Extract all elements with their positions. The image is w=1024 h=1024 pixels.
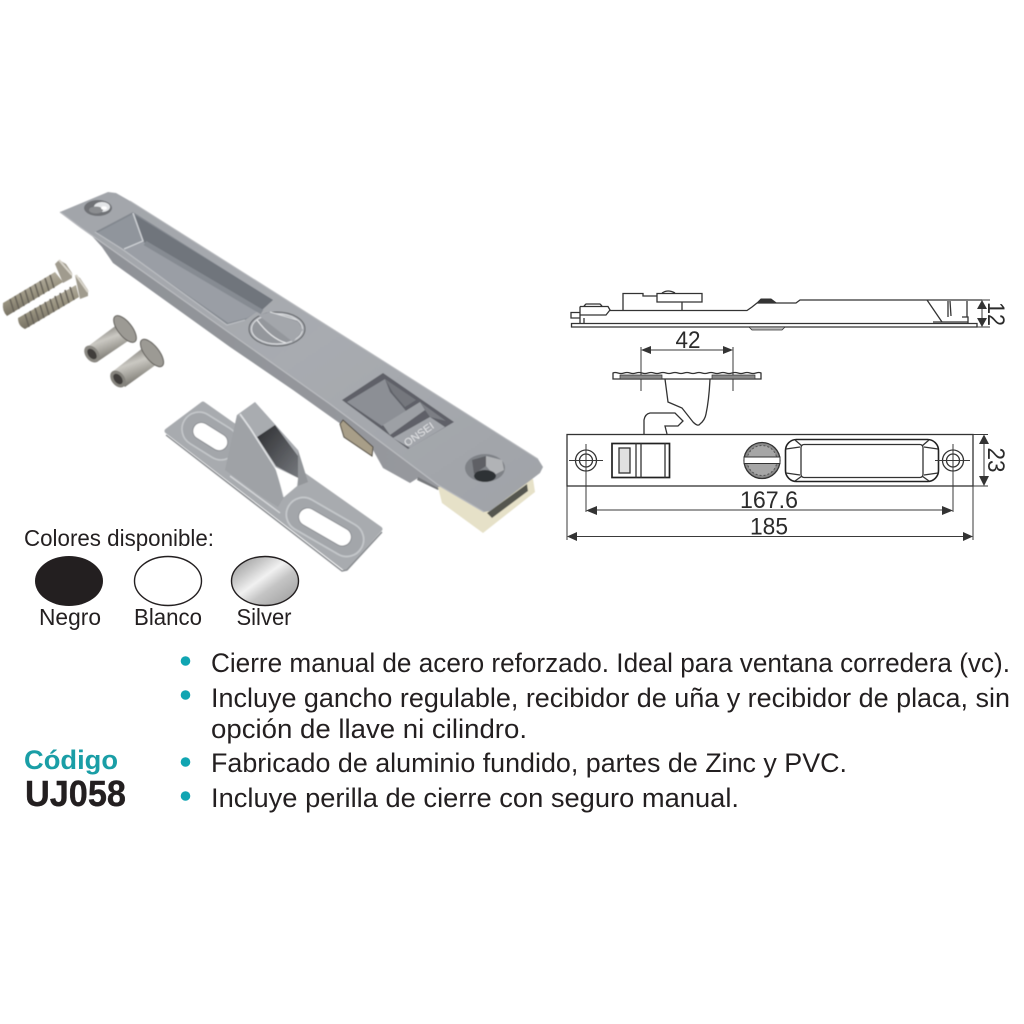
keeper opening: [257, 425, 298, 478]
metal tab below lock: [340, 420, 373, 456]
knob: [744, 442, 780, 478]
right screw hole: [935, 444, 970, 512]
feature bullet list: opción de llave ni cilindro.: [211, 714, 527, 744]
colour swatch: Negro: [35, 556, 103, 630]
colour swatch: Negro: Negro: [39, 604, 101, 630]
colour swatch: Blanco: Blanco: [134, 604, 202, 630]
keeper upper slot: [176, 406, 244, 466]
nylon slider block: [438, 479, 535, 533]
keeper tower: [225, 402, 308, 507]
colour swatch: Silver: Silver: [236, 604, 292, 630]
screw 1: [3, 260, 72, 316]
dimension: 185: 185: [750, 514, 788, 540]
catch window: [342, 373, 454, 449]
screw 2: [18, 275, 88, 329]
feature bullet list: [181, 648, 1010, 813]
finger recess: [95, 212, 273, 325]
keeper base: [167, 404, 380, 568]
dimension: height 23: [973, 434, 1009, 486]
feature bullet list: Fabricado de aluminio fundido, partes de Zinc y PVC.: [211, 748, 847, 778]
feature bullet list: Cierre manual de acero reforzado. Ideal para ventana corredera (vc).: [211, 648, 1010, 678]
faceplate: [60, 192, 543, 512]
sleeve nut 1: [81, 312, 140, 365]
dimension: height 23: 23: [982, 448, 1009, 472]
dimension: 167.6: [586, 487, 953, 515]
feature bullet list: Incluye perilla de cierre con seguro manual.: [211, 783, 739, 813]
technical drawing: front view: [567, 434, 973, 512]
catch: [612, 443, 670, 478]
keeper lower slot: [280, 491, 370, 563]
handle recess: [786, 440, 938, 482]
technical drawing: side view: [571, 291, 982, 330]
colour swatch: Silver: [232, 556, 298, 630]
catch marking: ONSEI: [402, 420, 437, 449]
bottom screw hole: [465, 454, 505, 482]
dimension: 185: [567, 486, 973, 541]
dimension: width 42: [641, 327, 733, 391]
product photo: sliding window lock body: [60, 192, 543, 533]
top screw hole: [84, 200, 112, 216]
product photo: keeper plate: [166, 402, 382, 571]
colours heading: Colores disponible:: [24, 525, 214, 551]
dimension: height 12: 12: [982, 302, 1009, 326]
dimension: width 42: 42: [676, 327, 700, 354]
lock side wall: [92, 236, 450, 490]
technical drawing: keeper and hook: [613, 372, 761, 434]
rotary knob: [249, 312, 305, 346]
dimension: 167.6: 167.6: [740, 487, 798, 514]
sleeve nut 2: [107, 336, 168, 390]
dimension: height 12: [968, 300, 1009, 327]
product code: UJ058: [25, 773, 126, 814]
product code: Código: [24, 745, 118, 775]
product code: [24, 745, 126, 814]
colour swatch: Blanco: [134, 556, 202, 630]
product photo: mounting screws: [3, 260, 168, 390]
left screw hole: [569, 444, 603, 512]
feature bullet list: Incluye gancho regulable, recibidor de uña y recibidor de placa, sin: [211, 683, 1010, 713]
